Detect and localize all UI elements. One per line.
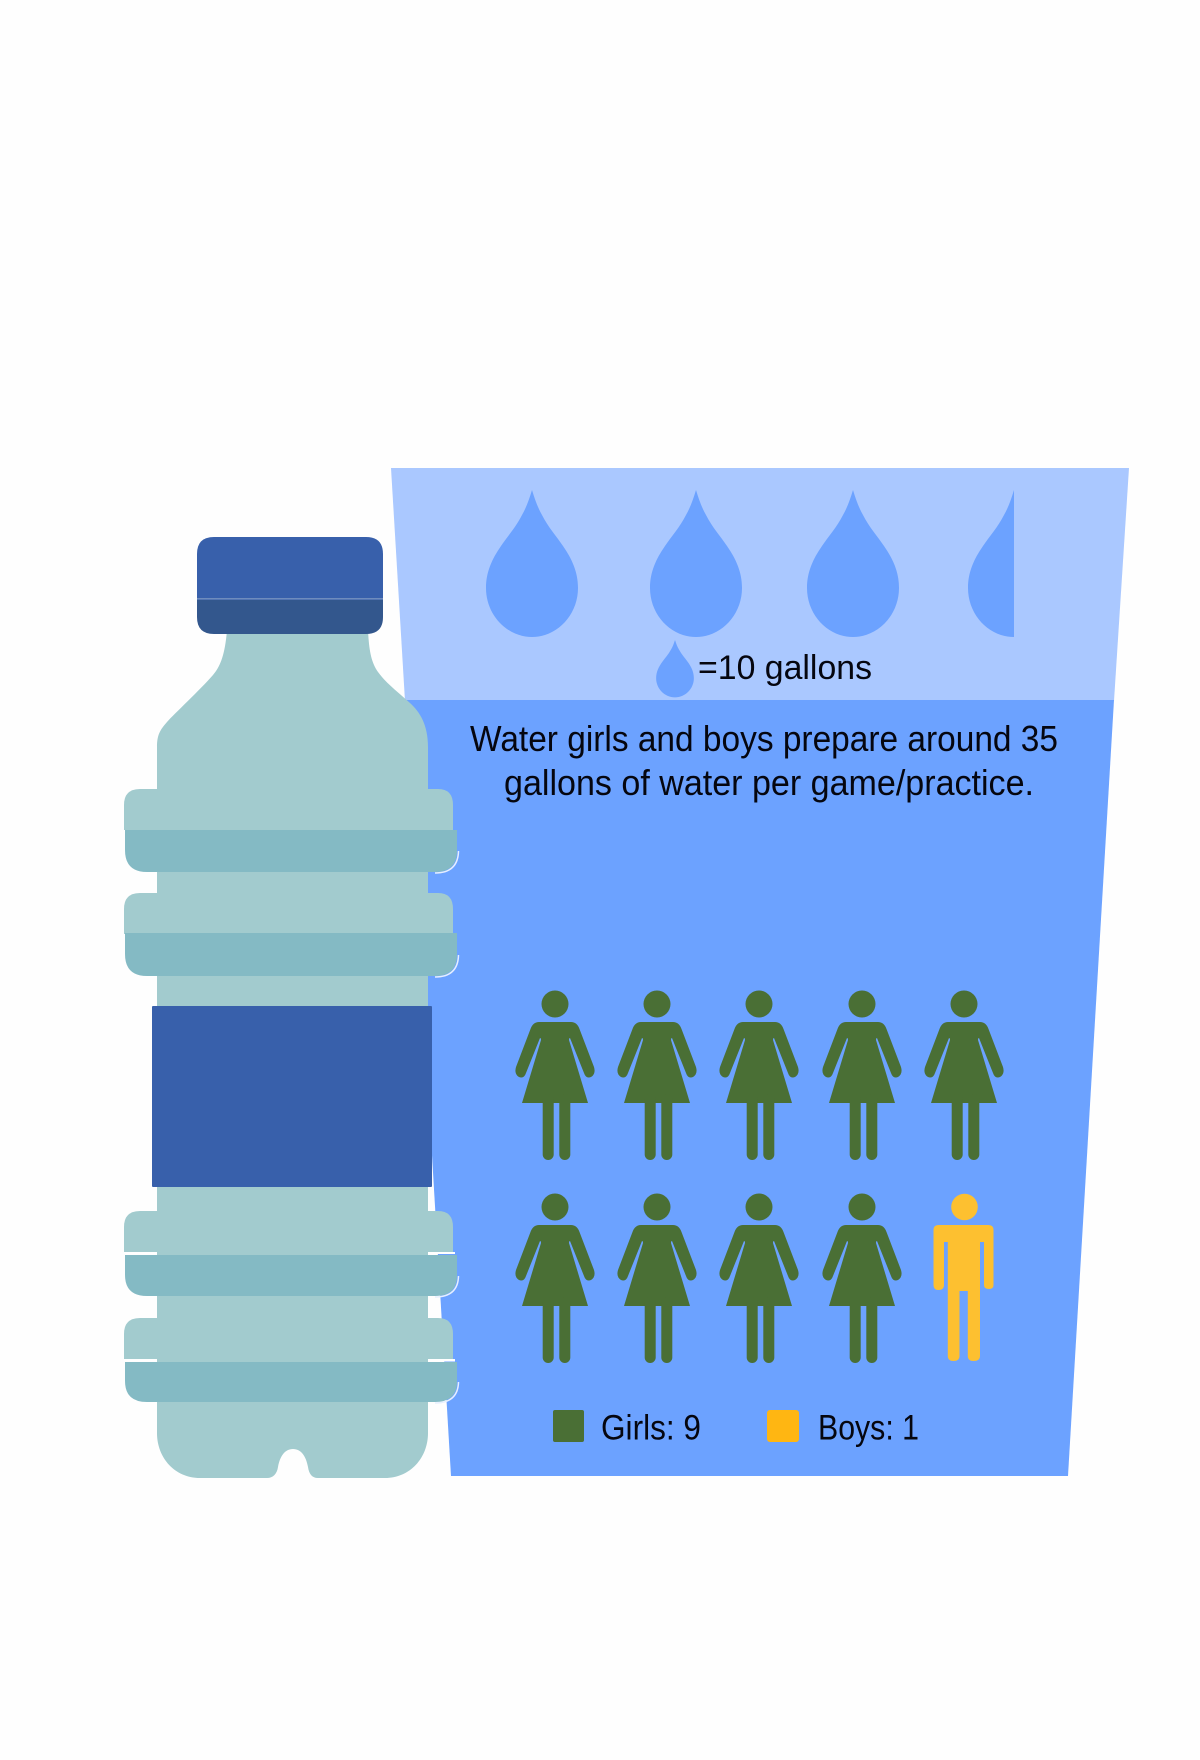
text block: statement: Water girls and boys prepare around 35 — [470, 718, 1058, 759]
pictogram: people row 2 — [515, 1194, 994, 1363]
bottle label — [152, 1006, 432, 1187]
icon: drop 3 — [807, 490, 899, 637]
icon: drop 1 — [486, 490, 578, 637]
bottle rib 3 — [124, 1211, 457, 1296]
bottle cap — [197, 537, 383, 634]
drop legend text: =10 gallons — [698, 649, 872, 687]
pictogram: water drops 35 gallons — [486, 490, 1014, 637]
text block: statement: gallons of water per game/practice. — [504, 762, 1034, 803]
legend label: boys: Boys: 1 — [818, 1408, 919, 1448]
icon: drop 2 — [650, 490, 742, 637]
bottle rib 4 — [124, 1318, 457, 1402]
icon: boy — [934, 1194, 994, 1361]
panel: water cup — [391, 468, 1129, 1476]
bottle rib 1 — [124, 789, 457, 872]
icon: girl — [617, 1194, 697, 1363]
legend swatch: girls — [553, 1410, 584, 1442]
panel: water bottle — [124, 537, 458, 1478]
cup empty top — [391, 468, 1129, 701]
pictogram: people row 1 — [515, 990, 1004, 1160]
legend swatch: boys — [767, 1410, 799, 1442]
legend label: girls: Girls: 9 — [601, 1408, 701, 1448]
icon: girl — [822, 990, 902, 1160]
icon: girl — [617, 990, 697, 1160]
legend: girls and boys — [553, 1408, 919, 1448]
icon: girl — [515, 1194, 595, 1363]
icon: girl — [719, 1194, 799, 1363]
bottle body — [157, 630, 428, 1478]
text block: statement — [470, 718, 1058, 803]
icon: girl — [719, 990, 799, 1160]
legend: drop equals 10 gallons — [656, 640, 872, 697]
cup water fill — [405, 700, 1114, 1476]
icon: girl — [515, 990, 595, 1160]
icon: girl — [924, 990, 1004, 1160]
icon: small drop — [656, 640, 694, 697]
icon: half drop — [968, 490, 1014, 637]
icon: girl — [822, 1194, 902, 1363]
bottle rib 2 — [124, 893, 457, 976]
